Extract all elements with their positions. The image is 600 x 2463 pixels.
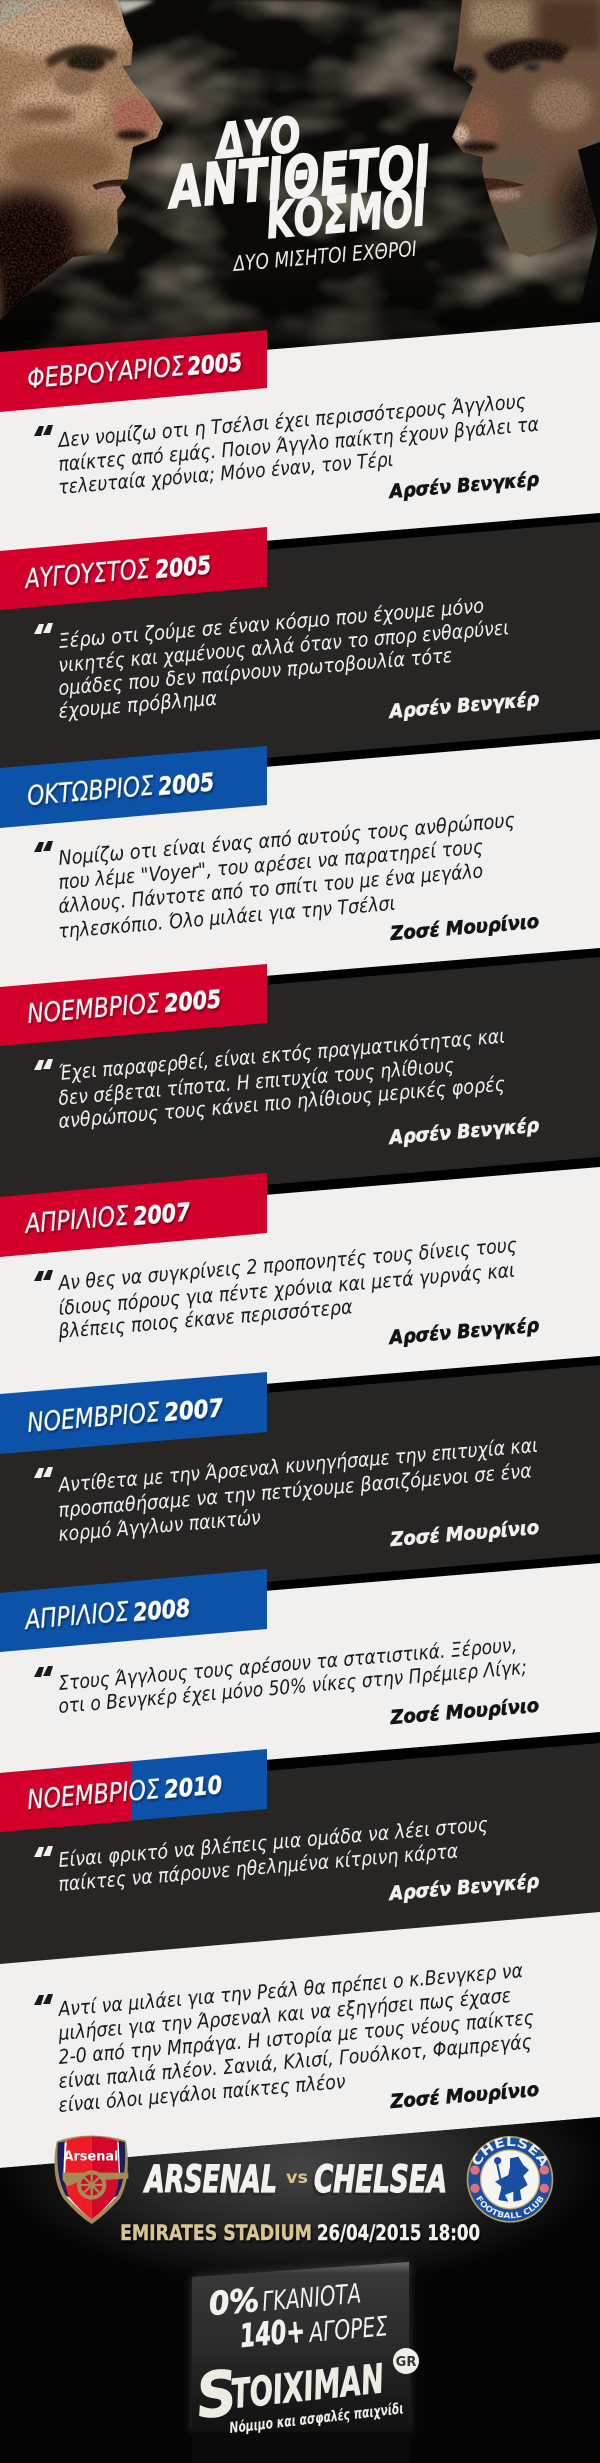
- quote icon: [34, 425, 53, 436]
- date label: Nov 2010: [0, 1749, 267, 1832]
- hero: Mourinho face: [450, 0, 600, 270]
- Stoiximan logo: S: [193, 2356, 240, 2433]
- title: Arsenal vs Chelsea: [143, 2158, 447, 2201]
- quote text: ίδιους πόρους για πέντε χρόνια και μετά γυρνάς και: [57, 1258, 516, 1320]
- quote text: κορμό Άγγλων παικτών: [57, 1505, 262, 1546]
- footer: match information: [0, 2117, 600, 2463]
- quote text: έχουμε πρόβλημα: [57, 686, 218, 723]
- quote text: προσπαθήσαμε να την πετύχουμε βασιζόμενοι σε ένα: [57, 1458, 533, 1522]
- quote text: τηλεσκόπιο. Όλο μιλάει για την Τσέλσι: [57, 891, 396, 943]
- panel: November 2005 quote: [0, 948, 600, 1230]
- stadium, date and kick-off: EMIRATES STADIUM: [120, 2221, 312, 2245]
- quote text: Έχει παραφερθεί, είναι εκτός πραγματικότητας και: [57, 1024, 506, 1085]
- quote text: άλλους. Πάντοτε από το σπίτι του με ένα μεγάλο: [57, 858, 484, 918]
- title: Arsenal vs Chelsea: CHELSEA: [314, 2158, 447, 2201]
- quote text: είναι όλοι μεγάλοι παίκτες πλέον: [57, 2069, 346, 2117]
- quote icon: [34, 1994, 53, 2005]
- date label: Apr 2007: 2007: [132, 1197, 192, 1231]
- date label: Feb 2005: ΦΕΒΡΟΥΑΡΙΟΣ: [26, 351, 186, 395]
- author: Αρσέν Βενγκέρ: [387, 688, 540, 723]
- author: Αρσέν Βενγκέρ: [387, 1114, 540, 1149]
- quote icon: [34, 1666, 53, 1677]
- quote text: [57, 593, 510, 723]
- panel: November 2007 quote: [0, 1356, 600, 1620]
- panel: August 2005 quote: [0, 513, 600, 800]
- quote text: Είναι φρικτό να βλέπεις μια ομάδα να λέει στους: [57, 1812, 489, 1872]
- quote text: βλέπεις ποιος έκανε περισσότερα: [57, 1294, 353, 1343]
- author: Ζοσέ Μουρίνιο: [389, 911, 540, 945]
- icon: Chelsea badge: FOOTBALL CLUB: [476, 2196, 544, 2218]
- date label: Nov 2005: [0, 964, 267, 1046]
- quote text: Αντί να μιλάει για την Ρεάλ θα πρέπει ο κ.Βενγκερ να: [56, 1958, 524, 2021]
- hero subtitle: ΔΥΟ ΜΙΣΗΤΟΙ ΕΧΘΡΟΙ: [231, 237, 418, 276]
- date label: Nov 2010: 2010: [163, 1770, 223, 1804]
- date label: Apr 2008: [0, 1569, 267, 1652]
- panel: April 2008 quote: [0, 1554, 600, 1800]
- date label: Apr 2007: ΑΠΡΙΛΙΟΣ: [22, 1200, 130, 1240]
- quote text: Νομίζω οτι είναι ένας από αυτούς τους ανθρώπους: [57, 808, 516, 870]
- hero title: ΚΟΣΜΟΙ: [264, 179, 428, 250]
- offer lines: ΓΚΑΝΙΟΤΑ: [261, 2278, 362, 2318]
- quote text: [57, 808, 516, 943]
- quote text: οτι ο Βενγκέρ έχει μόνο 50% νίκες στην Πρέμιερ Λίγκ;: [57, 1655, 528, 1718]
- quote text: [56, 389, 540, 499]
- date label: Aug 2005: ΑΥΓΟΥΣΤΟΣ: [22, 554, 151, 595]
- quote text: [56, 1958, 535, 2117]
- title: Arsenal vs Chelsea: vs: [286, 2168, 308, 2188]
- date label: Apr 2007: [0, 1173, 267, 1257]
- quote text: μιλήσει για την Άρσεναλ και να εξηγήσει πως έχασε: [57, 1983, 512, 2045]
- quote icon: [34, 1059, 53, 1070]
- quote icon: [34, 1270, 53, 1281]
- date label: Feb 2005: 2005: [186, 347, 243, 381]
- author: Αρσέν Βενγκέρ: [387, 1314, 540, 1349]
- title: Arsenal vs Chelsea: ARSENAL: [143, 2158, 277, 2201]
- hero: two managers facing each other: [0, 0, 600, 380]
- date label: Nov 2007: 2007: [163, 1393, 225, 1427]
- quote icon: [34, 1846, 53, 1857]
- quote text: παίκτες να πάρουνε ηθελημένα κίτρινη κάρτα: [57, 1839, 459, 1896]
- quote text: Αντίθετα με την Άρσεναλ κυνηγήσαμε την επιτυχία και: [56, 1433, 539, 1497]
- quote text: ανθρώπους τους κάνει πιο ηλίθιους μερικές φορές: [57, 1072, 506, 1133]
- panel: October 2005 quote: [0, 730, 600, 1020]
- author: Ζοσέ Μουρίνιο: [389, 1517, 540, 1551]
- date label: Apr 2008: 2008: [132, 1593, 191, 1627]
- panel: April 2007 quote: [0, 1157, 600, 1430]
- quote text: είναι παλιά πλέον. Σανιά, Κλισί, Γουόλκοτ, Φαμπρεγάς: [57, 2029, 533, 2093]
- quote icon: [34, 623, 53, 634]
- quote text: Αν θες να συγκρίνεις 2 προπονητές τους δίνεις τους: [56, 1233, 518, 1295]
- date label: Oct 2005: ΟΚΤΩΒΡΙΟΣ: [26, 770, 155, 812]
- quote text: ομάδες που δεν παίρνουν πρωτοβουλία τότε: [57, 643, 453, 700]
- quote text: Στους Άγγλους τους αρέσουν τα στατιστικά. Ξέρουν,: [57, 1633, 518, 1695]
- quote text: Ξέρω οτι ζούμε σε έναν κόσμο που έχουμε μόνο: [57, 593, 485, 653]
- date label: Oct 2005: [0, 746, 267, 828]
- date label: Nov 2005: 2005: [163, 984, 222, 1018]
- date label: Nov 2007: ΝΟΕΜΒΡΙΟΣ: [26, 1397, 161, 1439]
- Stoiximan logo: [193, 2356, 386, 2433]
- date label: Aug 2005: [0, 527, 267, 610]
- quote text: παίκτες από εμάς. Ποιον Άγγλο παίκτη έχουν βγάλει τα: [57, 412, 540, 476]
- quote icon: [34, 841, 53, 852]
- quote text: 2-0 από την Μπράγα. Η ιστορία με τους νέους παίκτες: [57, 2005, 535, 2069]
- panel: November 2010 quote: [0, 1732, 600, 2000]
- offer lines: 0%: [207, 2281, 261, 2323]
- icon: Chelsea badge: CHELSEA: [472, 2136, 548, 2167]
- icon: Chelsea badge: [466, 2136, 554, 2223]
- hero title: ΔΥΟ: [211, 107, 303, 170]
- GR badge: [393, 2348, 419, 2374]
- date label: Feb 2005: [0, 330, 267, 412]
- tagline: Νόμιμο και ασφαλές παιχνίδι: [228, 2399, 404, 2437]
- panel: February 2005 quote: [0, 322, 600, 600]
- author: Αρσέν Βενγκέρ: [387, 1870, 540, 1905]
- offer lines: ΑΓΟΡΕΣ: [306, 2311, 389, 2349]
- quote text: που λέμε "Voyer", του αρέσει να παρατηρεί τους: [57, 834, 484, 894]
- date label: Aug 2005: 2005: [154, 550, 212, 584]
- offer lines: 140+: [238, 2311, 306, 2355]
- hero title: ΑΝΤΙΘΕΤΟΙ: [164, 132, 433, 222]
- author: Ζοσέ Μουρίνιο: [389, 1695, 540, 1729]
- stadium, date and kick-off: 26/04/2015 18:00: [317, 2221, 480, 2245]
- GR badge: GR: [396, 2355, 416, 2370]
- hero: Wenger face: [0, 0, 170, 330]
- quote text: δεν σέβεται τίποτα. Η επιτυχία τους ηλίθιους: [57, 1053, 455, 1110]
- quote text: τελευταία χρόνια; Μόνο έναν, τον Τέρι: [57, 447, 394, 499]
- quote text: [56, 1433, 539, 1546]
- hero title: [164, 107, 433, 276]
- quote text: [56, 1233, 518, 1343]
- date label: Oct 2005: 2005: [157, 767, 215, 801]
- author: Αρσέν Βενγκέρ: [387, 468, 540, 503]
- date label: Nov 2005: ΝΟΕΜΒΡΙΟΣ: [26, 988, 161, 1030]
- date label: Nov 2010: ΝΟΕΜΒΡΙΟΣ: [26, 1774, 161, 1816]
- author: Ζοσέ Μουρίνιο: [389, 2079, 540, 2113]
- quote text: Δεν νομίζω οτι η Τσέλσι έχει περισσότερους Άγγλους: [56, 389, 527, 452]
- icon: Arsenal badge: Arsenal: [63, 2150, 118, 2165]
- offer lines: [207, 2278, 389, 2355]
- quote text: νικητές και χαμένους αλλά όταν το σπορ ενθαρύνει: [57, 615, 510, 677]
- panel: Stoiximan advert: [192, 2262, 419, 2463]
- quote text: [57, 1024, 506, 1133]
- icon: Arsenal badge: [54, 2135, 128, 2224]
- date label: Apr 2008: ΑΠΡΙΛΙΟΣ: [22, 1596, 130, 1636]
- stadium, date and kick-off: [120, 2221, 480, 2245]
- panel: final Mourinho quote: [0, 1912, 600, 2200]
- date label: Nov 2007: [0, 1372, 267, 1454]
- quote icon: [34, 1467, 53, 1478]
- Stoiximan logo: TOIXIMAN: [229, 2356, 386, 2418]
